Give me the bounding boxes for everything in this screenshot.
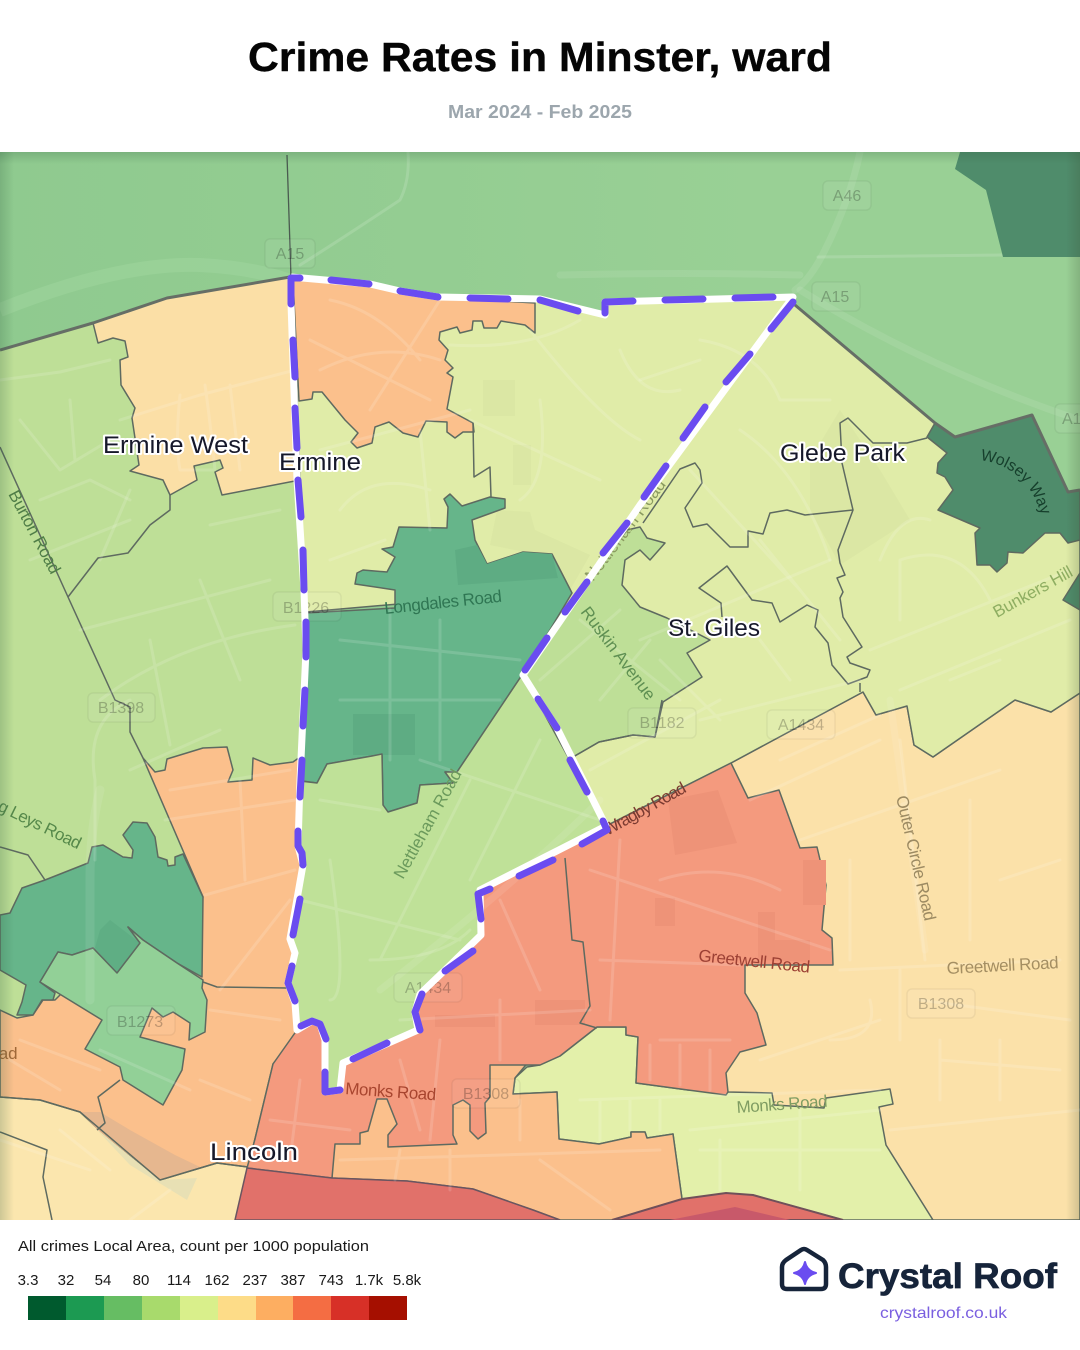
region: bottom-left orange <box>0 747 300 1180</box>
road name labels: Ruskin Avenue <box>577 603 659 704</box>
legend scale values: 54 <box>95 1272 111 1289</box>
road shields: B1182 <box>639 715 685 732</box>
map edge shading <box>0 152 1080 1220</box>
road shields: A1434 <box>778 717 824 734</box>
place labels: Ermine <box>279 449 361 476</box>
icon: house with star <box>782 1249 826 1289</box>
road name labels: Nettleham Road <box>390 766 466 882</box>
place labels: St. Giles <box>668 615 760 642</box>
road name labels: Burton Road <box>4 487 64 577</box>
legend scale values: 114 <box>167 1272 191 1289</box>
road shields <box>88 181 1080 1108</box>
road shields: B1398 <box>98 700 144 717</box>
region: bottom red band east <box>612 1193 843 1220</box>
thin line north of the ward <box>287 155 291 277</box>
region: salmon high crime <box>247 763 833 1178</box>
road name labels: Greetwell Road <box>698 946 811 977</box>
map base: low-crime green surround <box>0 152 1080 1070</box>
thick district boundary along the top <box>0 277 1080 492</box>
region: lower orange <box>332 1060 682 1220</box>
region: Wolsey Way dark green <box>927 415 1080 572</box>
legend scale values: 743 <box>318 1272 344 1289</box>
school grounds shading <box>483 380 910 590</box>
road name labels: Longdales Road <box>383 587 503 618</box>
region: teal south-west <box>0 822 203 1015</box>
road name labels: Wolsey Way <box>982 449 1050 512</box>
panel: choropleth map <box>0 152 1080 1220</box>
place labels: Glebe Park <box>780 440 906 467</box>
region: lighter green south-west <box>40 927 207 1105</box>
place labels <box>103 432 906 1166</box>
legend <box>18 1238 422 1320</box>
road name labels: Bunkers Hill <box>990 562 1076 621</box>
legend scale values: 3.3 <box>18 1272 38 1289</box>
road shields: A15 <box>276 246 304 263</box>
station band <box>97 1130 197 1200</box>
region: Ruskin Avenue mid-green <box>523 527 710 757</box>
region: Nettleham mid-green <box>288 675 606 1092</box>
salmon interior blocks <box>819 860 826 905</box>
road name labels <box>0 406 1073 1113</box>
legend scale values: 387 <box>280 1272 306 1289</box>
road shields: A15 <box>821 289 849 306</box>
logo: Crystal Roof <box>782 1249 1057 1322</box>
road name labels: Monks Road <box>736 1092 828 1117</box>
region: bottom red band west <box>235 1168 560 1220</box>
road shields: A1434 <box>405 980 451 997</box>
ward boundary: white casing <box>288 277 793 1092</box>
region: yellow-green Ermine, Glebe Park, St Giles <box>293 280 1080 826</box>
legend scale values <box>18 1272 422 1289</box>
top-left road band <box>9 276 84 314</box>
legend scale values: 1.7k <box>355 1272 384 1289</box>
A46 and A15 roads north of the ward <box>300 152 1080 420</box>
website: crystalroof.co.uk <box>880 1305 1008 1322</box>
ward boundary: purple dashes <box>288 278 793 1092</box>
region: right edge dark green fragment <box>1063 573 1080 610</box>
legend scale values: 32 <box>58 1272 74 1289</box>
title: Crime Rates in Minster, ward <box>248 34 832 80</box>
region: Longdales teal <box>302 494 572 812</box>
legend colour ramp <box>28 1296 407 1320</box>
road shields: B1308 <box>463 1086 509 1103</box>
region: Ermine orange <box>293 280 535 448</box>
dark green area top right <box>955 152 1080 257</box>
road shields: B1308 <box>918 996 964 1013</box>
region: Monks Road yellow-green <box>513 1027 933 1220</box>
road name labels: Outer Circle Road <box>892 794 939 923</box>
teal interior blocks <box>353 545 558 755</box>
road name labels: Monks Road <box>345 1079 437 1104</box>
bottom red band core <box>670 1207 790 1220</box>
road name labels: Nettleham Road <box>581 476 670 584</box>
place labels: Lincoln <box>210 1139 298 1166</box>
region: bottom-left pale <box>0 1097 248 1220</box>
thin internal boundaries <box>0 418 927 1220</box>
legend scale values: 80 <box>133 1272 149 1289</box>
legend title: All crimes Local Area, count per 1000 population <box>18 1238 369 1255</box>
legend scale values: 162 <box>204 1272 230 1289</box>
legend scale values: 237 <box>242 1272 268 1289</box>
road shields: B1273 <box>117 1014 163 1031</box>
residential road network <box>0 300 1080 1220</box>
road shields: A46 <box>833 188 861 205</box>
subtitle: date range: Mar 2024 - Feb 2025 <box>448 102 632 122</box>
road name labels: Wragby Road <box>600 778 689 839</box>
region: Ermine West pale orange <box>93 277 300 495</box>
place labels: Ermine West <box>103 432 248 459</box>
road shields: B1226 <box>283 600 329 617</box>
road name labels: Greetwell Road <box>946 953 1059 978</box>
legend scale values: 5.8k <box>393 1272 422 1289</box>
rail corridor near Lincoln <box>80 1112 200 1180</box>
region: right pale orange <box>726 693 1080 1220</box>
teal block <box>106 942 139 972</box>
logo wordmark: Crystal Roof <box>838 1257 1057 1296</box>
region: left mid-green <box>0 324 302 1018</box>
